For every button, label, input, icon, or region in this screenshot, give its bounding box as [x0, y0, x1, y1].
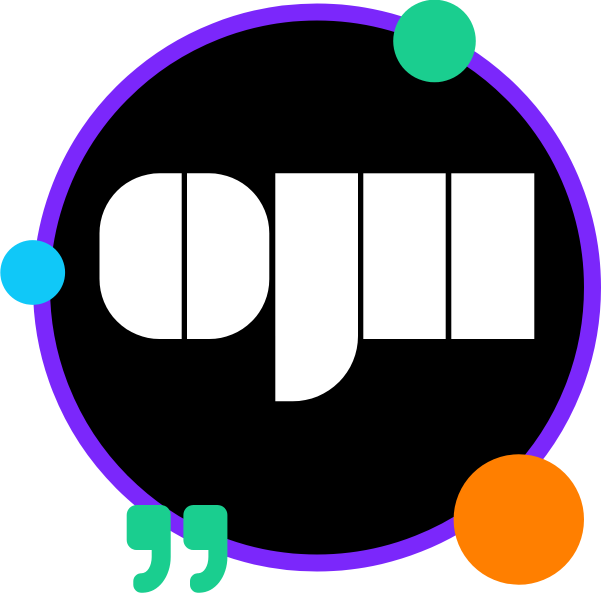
orange circle: [454, 454, 584, 585]
blue circle: [0, 240, 65, 305]
green circle: [393, 0, 476, 82]
letter u left bar: [363, 173, 446, 339]
right quote mark: [183, 505, 227, 593]
logo mark: [100, 173, 534, 401]
icon: quotation marks: [127, 505, 227, 593]
left quote mark: [127, 505, 171, 593]
letter j: [275, 173, 358, 401]
letter o left half: [100, 173, 182, 339]
letter u right bar: [451, 173, 534, 339]
letter o right half: [187, 173, 269, 339]
